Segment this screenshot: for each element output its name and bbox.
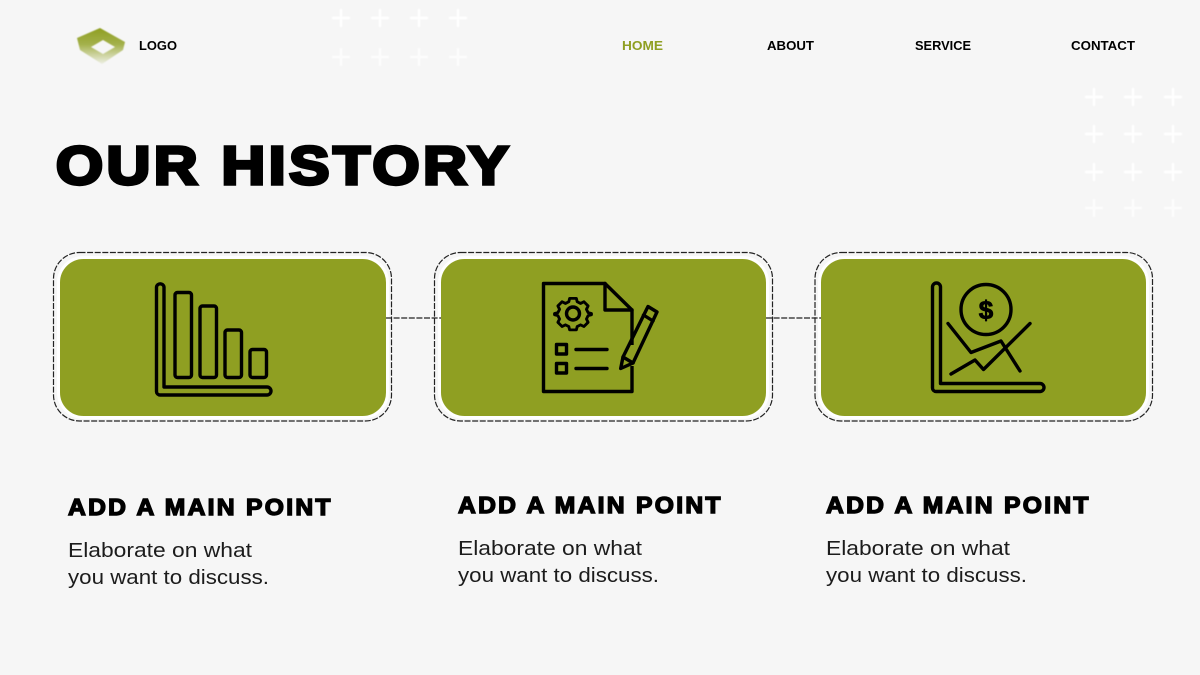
body: point 3: you want to discuss. — [826, 565, 1027, 587]
decorative plus grid: top — [332, 9, 467, 66]
title: OUR HISTORY — [56, 136, 508, 196]
heading: point 1: ADD A MAIN POINT — [68, 495, 331, 521]
text block: point 3 — [826, 493, 1089, 587]
heading: point 2: ADD A MAIN POINT — [458, 493, 721, 519]
nav: service: SERVICE — [915, 38, 971, 53]
nav: about: ABOUT — [767, 38, 814, 53]
text block: point 2 — [458, 493, 721, 587]
logo — [77, 28, 177, 64]
body: point 2 — [458, 538, 659, 587]
body: point 3 — [826, 538, 1027, 587]
panel: finance card — [815, 252, 1152, 421]
body: point 1: Elaborate on what — [68, 540, 252, 562]
icon: finance chart with dollar coin: $ — [979, 295, 994, 325]
connector: panel 1 to 2 — [386, 317, 441, 319]
icon: document with gear and pencil — [544, 284, 657, 392]
text block: point 1 — [68, 495, 331, 589]
body: point 3: Elaborate on what — [826, 538, 1010, 560]
icon: logo diamond — [77, 28, 125, 64]
icon: finance chart with dollar coin — [932, 283, 1044, 392]
connector: panel 2 to 3 — [766, 317, 821, 319]
body: point 1 — [68, 540, 269, 589]
icon: descending bar chart — [156, 284, 271, 395]
body: point 2: you want to discuss. — [458, 565, 659, 587]
panel: bar chart card — [54, 252, 392, 421]
logo text: LOGO — [139, 38, 177, 53]
heading: point 3: ADD A MAIN POINT — [826, 493, 1089, 519]
panel: report card — [434, 252, 772, 421]
body: point 1: you want to discuss. — [68, 567, 269, 589]
body: point 2: Elaborate on what — [458, 538, 642, 560]
nav: contact: CONTACT — [1071, 38, 1135, 53]
decorative plus grid: right — [1085, 88, 1182, 217]
nav: home: HOME — [622, 38, 663, 53]
navigation — [622, 38, 1135, 53]
